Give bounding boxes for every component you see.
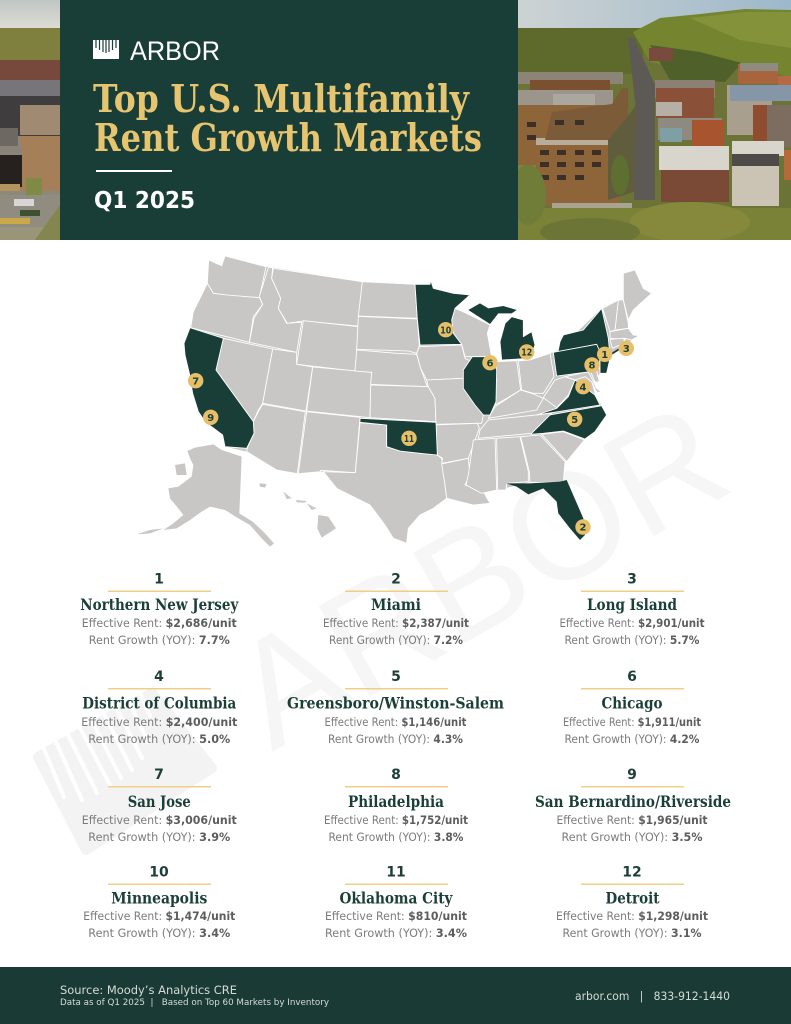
market 9: San Bernardino/Riverside: Effective Rent: $1,965/unit: [556, 813, 708, 827]
market 8: Philadelphia: 8: [391, 767, 401, 783]
market 2: Miami: Miami: [371, 595, 421, 614]
market 5: Greensboro/Winston-Salem: Rent Growth (YOY): 4.3%: [328, 732, 463, 746]
market 7: San Jose: Effective Rent: $3,006/unit: [82, 813, 237, 827]
source note: [60, 983, 330, 1008]
map markers: 4: [580, 382, 587, 393]
map markers: 11: [404, 434, 414, 445]
market 3: Long Island: Long Island: [587, 595, 677, 614]
watermark: ARBOR wordmark and logo: [38, 369, 753, 850]
map markers: 1: [601, 350, 608, 361]
map markers: 8: [589, 361, 596, 372]
map markers: 10: [440, 325, 451, 336]
market 5: Greensboro/Winston-Salem: 5: [391, 669, 401, 685]
subtitle: Q1 2025: [94, 188, 195, 214]
market 10: Minneapolis: 10: [149, 865, 169, 881]
market 5: Greensboro/Winston-Salem: Greensboro/Winston-Salem: [287, 693, 505, 712]
market 4: District of Columbia: Rent Growth (YOY): 5.0%: [88, 732, 231, 746]
header panel: [60, 0, 518, 240]
market 6: Chicago: [563, 669, 701, 746]
western states: [191, 256, 372, 474]
market 6: Chicago: Chicago: [602, 693, 662, 712]
market 2: Miami: [323, 571, 469, 647]
market 1: Northern New Jersey: Northern New Jersey: [80, 595, 239, 614]
market 10: Minneapolis: Effective Rent: $1,474/unit: [83, 909, 236, 923]
market 12: Detroit: Rent Growth (YOY): 3.1%: [562, 926, 702, 940]
source note: Source: Moody’s Analytics CRE: [60, 983, 237, 997]
map markers: [188, 322, 634, 535]
map markers: 5: [571, 415, 578, 426]
title: Top U.S. Multifamily: [93, 77, 470, 122]
market 6: Chicago: Rent Growth (YOY): 4.2%: [564, 732, 700, 746]
source note: Data as of Q1 2025 | Based on Top 60 Markets by Inventory: [60, 998, 330, 1008]
watermark: ARBOR wordmark and logo: ARBOR: [205, 369, 753, 780]
Alaska and Hawaii: [137, 444, 336, 547]
market 12: Detroit: 12: [622, 865, 642, 881]
market 1: Northern New Jersey: Effective Rent: $2,686/unit: [82, 616, 237, 630]
market 2: Miami: Effective Rent: $2,387/unit: [323, 616, 469, 630]
market 3: Long Island: Rent Growth (YOY): 5.7%: [564, 633, 700, 647]
market 4: District of Columbia: 4: [154, 669, 164, 685]
market 7: San Jose: San Jose: [128, 792, 191, 811]
market 7: San Jose: 7: [154, 767, 164, 783]
market 12: Detroit: Effective Rent: $1,298/unit: [556, 909, 708, 923]
map markers: 2: [580, 523, 587, 534]
market 8: Philadelphia: Effective Rent: $1,752/unit: [324, 813, 468, 827]
central and eastern states: [323, 270, 652, 543]
market 7: San Jose: Rent Growth (YOY): 3.9%: [88, 830, 231, 844]
market 10: Minneapolis: Rent Growth (YOY): 3.4%: [88, 926, 231, 940]
market 7: San Jose: [82, 767, 237, 844]
market 4: District of Columbia: [81, 669, 238, 746]
map markers: 12: [521, 348, 532, 359]
market 3: Long Island: [560, 571, 705, 647]
market 11: Oklahoma City: Rent Growth (YOY): 3.4%: [325, 926, 467, 940]
market 11: Oklahoma City: Oklahoma City: [340, 888, 453, 907]
icon: Arbor logo mark: [93, 40, 119, 59]
map: United States: [137, 256, 652, 547]
market 8: Philadelphia: [324, 767, 468, 844]
map markers: 3: [623, 344, 630, 355]
market 4: District of Columbia: Effective Rent: $2,400/unit: [81, 715, 238, 729]
market 2: Miami: Rent Growth (YOY): 7.2%: [329, 633, 463, 647]
market 1: Northern New Jersey: Rent Growth (YOY): 7.7%: [89, 633, 230, 647]
market 8: Philadelphia: Philadelphia: [348, 792, 444, 811]
market 4: District of Columbia: District of Columbia: [82, 693, 236, 712]
market 11: Oklahoma City: [325, 865, 467, 940]
footer bar: [0, 967, 791, 1024]
market 12: Detroit: [556, 865, 708, 940]
market 9: San Bernardino/Riverside: [535, 767, 731, 844]
market 10: Minneapolis: [83, 865, 236, 940]
map markers: 9: [207, 413, 214, 424]
logo wordmark: ARBOR: [130, 36, 220, 66]
market 9: San Bernardino/Riverside: 9: [627, 767, 637, 783]
highlighted state: California: [184, 328, 254, 448]
market 5: Greensboro/Winston-Salem: Effective Rent: $1,146/unit: [324, 715, 467, 729]
contact details: arbor.com | 833-912-1440: [575, 989, 730, 1003]
market 6: Chicago: 6: [627, 669, 637, 685]
title: [93, 77, 482, 161]
market 10: Minneapolis: Minneapolis: [111, 888, 208, 907]
photo: left city view: [0, 0, 60, 240]
contiguous backing silhouette: [185, 256, 632, 543]
market 11: Oklahoma City: 11: [386, 865, 406, 881]
photo: right city view: [510, 0, 791, 246]
market 5: Greensboro/Winston-Salem: [287, 669, 505, 746]
market 2: Miami: 2: [391, 571, 401, 587]
market 12: Detroit: Detroit: [606, 888, 660, 907]
market 9: San Bernardino/Riverside: Rent Growth (YOY): 3.5%: [562, 830, 703, 844]
market 11: Oklahoma City: Effective Rent: $810/unit: [325, 909, 467, 923]
market 3: Long Island: 3: [627, 571, 637, 587]
title: Rent Growth Markets: [94, 116, 482, 161]
market 1: Northern New Jersey: [80, 571, 239, 647]
map markers: 6: [487, 358, 494, 369]
market 1: Northern New Jersey: 1: [154, 571, 164, 587]
market 3: Long Island: Effective Rent: $2,901/unit: [560, 616, 705, 630]
highlighted states: central and eastern: [360, 280, 619, 540]
market 9: San Bernardino/Riverside: San Bernardino/Riverside: [535, 792, 731, 811]
market 6: Chicago: Effective Rent: $1,911/unit: [563, 715, 701, 729]
map markers: 7: [192, 376, 199, 387]
market 8: Philadelphia: Rent Growth (YOY): 3.8%: [328, 830, 464, 844]
